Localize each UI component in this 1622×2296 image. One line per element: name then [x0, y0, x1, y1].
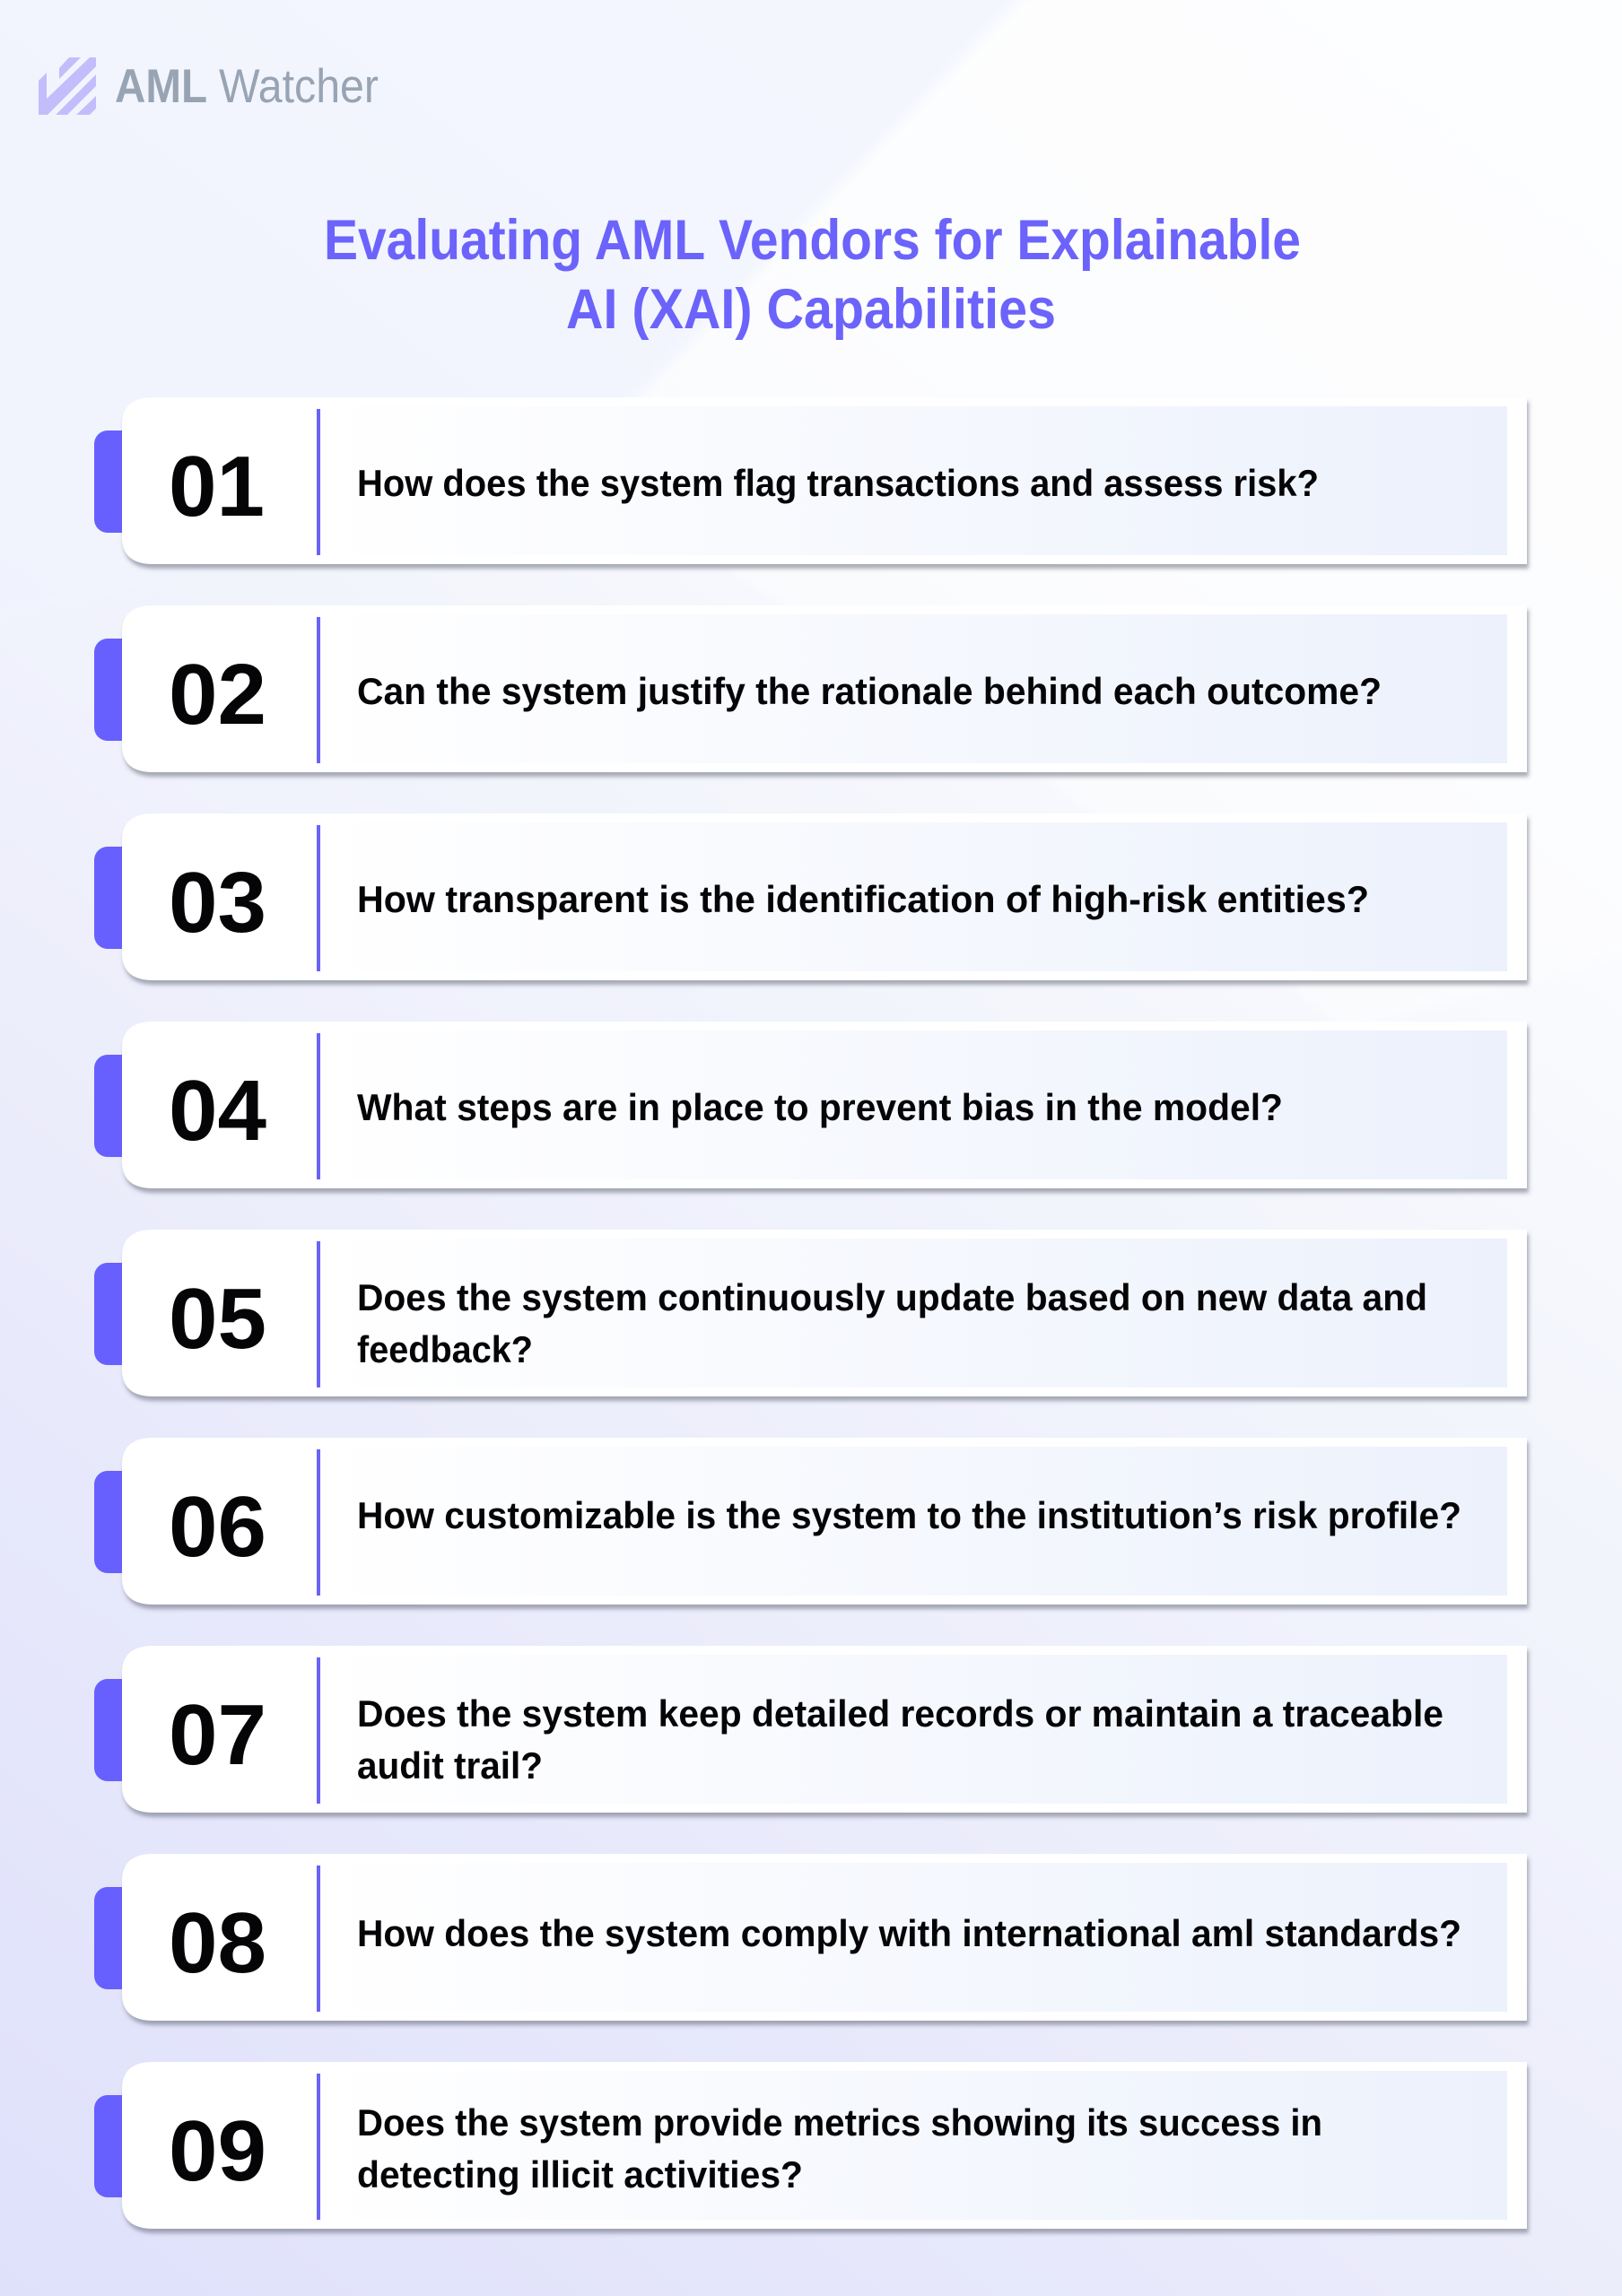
card [122, 813, 1527, 980]
item 01 [94, 397, 1527, 564]
question: Can the system justify the rationale behind each outcome? [357, 670, 1382, 712]
number: 07 [169, 1687, 266, 1783]
tab [94, 1679, 139, 1781]
question: detecting illicit activities? [357, 2153, 803, 2196]
number: 06 [169, 1479, 266, 1575]
icon: logo stripes [39, 57, 96, 115]
tab [94, 1887, 139, 1989]
item 09 [94, 2062, 1527, 2229]
question: Does the system continuously update based on new data and [357, 1276, 1427, 1318]
question: How does the system comply with international aml standards? [357, 1912, 1461, 1954]
tab [94, 1055, 139, 1157]
tab [94, 1263, 139, 1365]
item 06 [94, 1438, 1527, 1605]
question: What steps are in place to prevent bias in the model? [357, 1086, 1283, 1128]
item 08 [94, 1854, 1527, 2021]
number: 04 [169, 1063, 266, 1159]
question: Does the system keep detailed records or maintain a traceable [357, 1692, 1443, 1735]
question [357, 2101, 1322, 2196]
number: 02 [169, 647, 266, 743]
card [122, 1230, 1527, 1396]
question [357, 1692, 1443, 1787]
title: AI (XAI) Capabilities [566, 278, 1056, 341]
number: 08 [169, 1895, 266, 1991]
card [122, 1438, 1527, 1605]
card [122, 397, 1527, 564]
wordmark: Watcher [219, 60, 379, 113]
item 02 [94, 605, 1527, 772]
question: How transparent is the identification of high-risk entities? [357, 878, 1369, 920]
logo: AML Watcher [39, 57, 379, 115]
card [122, 1646, 1527, 1813]
tab [94, 1471, 139, 1573]
number: 03 [169, 855, 266, 951]
number: 09 [169, 2103, 266, 2199]
question: audit trail? [357, 1744, 543, 1787]
number: 05 [169, 1271, 266, 1367]
card [122, 605, 1527, 772]
item 05 [94, 1230, 1527, 1396]
title [324, 209, 1301, 341]
tab [94, 2095, 139, 2197]
tab [94, 430, 139, 533]
wordmark [115, 60, 379, 113]
wordmark: AML [115, 60, 207, 113]
question [357, 1276, 1427, 1370]
item 03 [94, 813, 1527, 980]
item 04 [94, 1022, 1527, 1188]
question: Does the system provide metrics showing its success in [357, 2101, 1322, 2144]
item 07 [94, 1646, 1527, 1813]
tab [94, 639, 139, 741]
card [122, 1022, 1527, 1188]
title: Evaluating AML Vendors for Explainable [324, 209, 1301, 272]
question: How customizable is the system to the institution’s risk profile? [357, 1494, 1461, 1536]
question: feedback? [357, 1328, 533, 1370]
number: 01 [169, 439, 265, 535]
tab [94, 847, 139, 949]
question: How does the system flag transactions and assess risk? [357, 462, 1319, 504]
card [122, 1854, 1527, 2021]
card [122, 2062, 1527, 2229]
